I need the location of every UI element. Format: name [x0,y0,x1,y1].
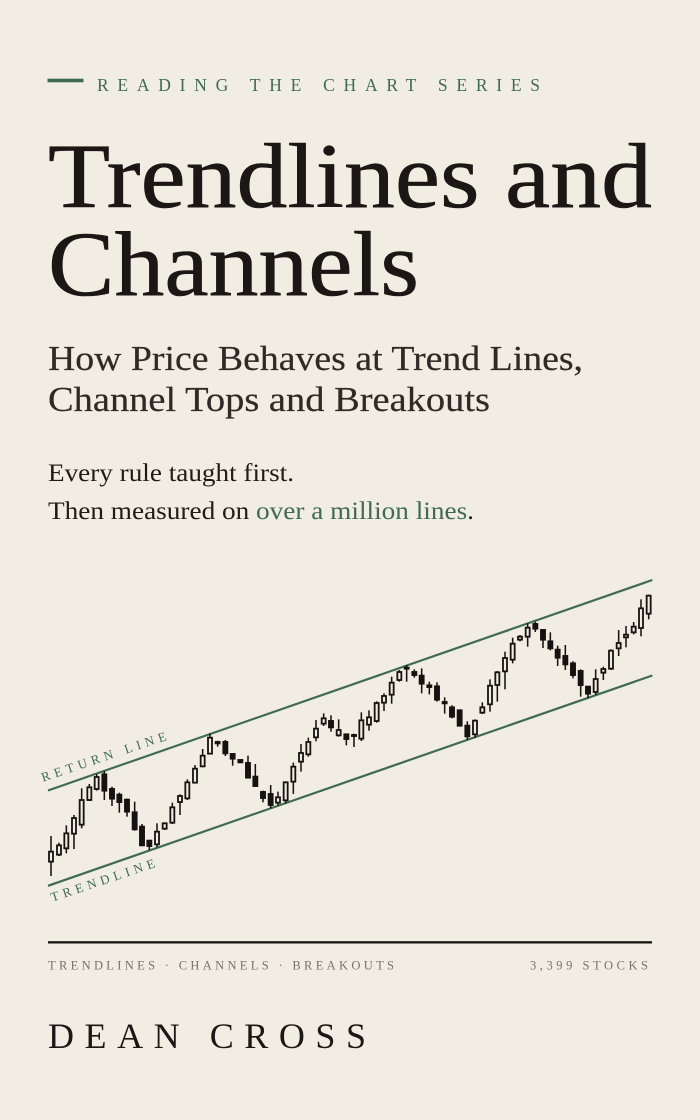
title: Channels [48,213,419,315]
footer stock count: 3,399 STOCKS [530,958,648,972]
candlesticks [49,595,651,876]
tagline [48,460,474,525]
footer topics: TRENDLINES · CHANNELS · BREAKOUTS [48,958,394,972]
series accent rule [48,79,84,82]
subtitle: Channel Tops and Breakouts [48,380,490,419]
subtitle [48,339,583,419]
title [48,125,652,315]
tagline: Every rule taught first. [48,460,294,487]
tagline: Then measured on over a million lines . [48,498,474,525]
title: Trendlines and [48,125,652,227]
trendline label: TRENDLINE [49,856,157,905]
author: DEAN CROSS [48,1016,366,1056]
channel chart [39,580,652,905]
footer rule [48,941,652,944]
return line label: RETURN LINE [39,729,168,785]
series label: READING THE CHART SERIES [97,75,540,95]
return line [48,580,652,790]
trendline [48,676,652,886]
subtitle: How Price Behaves at Trend Lines, [48,339,583,378]
